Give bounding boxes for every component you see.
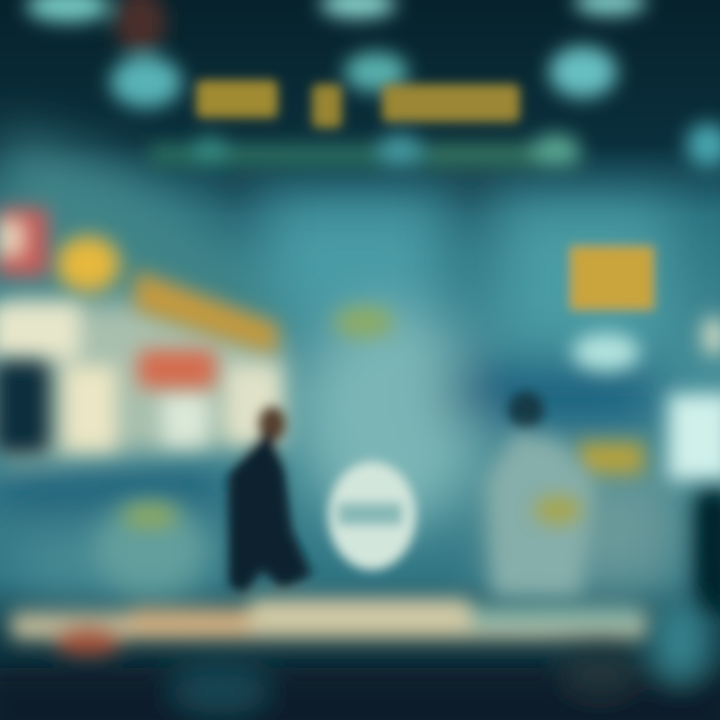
- shelf base: [0, 300, 285, 465]
- ceiling lights: [26, 0, 720, 167]
- right dark figure: [694, 490, 720, 620]
- red banner: [138, 350, 216, 388]
- yellow label right: [578, 442, 644, 474]
- white tag right: [572, 333, 640, 371]
- red sign: [0, 208, 48, 276]
- left circle outline: [94, 502, 206, 594]
- yellow signs: [56, 236, 280, 355]
- title: [196, 80, 520, 128]
- standing figure: [486, 391, 595, 595]
- central white circle: [328, 462, 416, 570]
- left shelf of colourful items: [0, 208, 285, 465]
- white blocks: [0, 304, 280, 450]
- floor strip: [10, 598, 650, 658]
- yellow card right: [570, 246, 654, 310]
- small label centre: [334, 306, 394, 338]
- walking figure: [228, 406, 312, 595]
- background panels: [0, 130, 680, 590]
- bottom dark area: [0, 600, 720, 720]
- subtitle: [150, 134, 580, 166]
- dark column: [0, 360, 50, 454]
- right edge glow: [668, 316, 720, 480]
